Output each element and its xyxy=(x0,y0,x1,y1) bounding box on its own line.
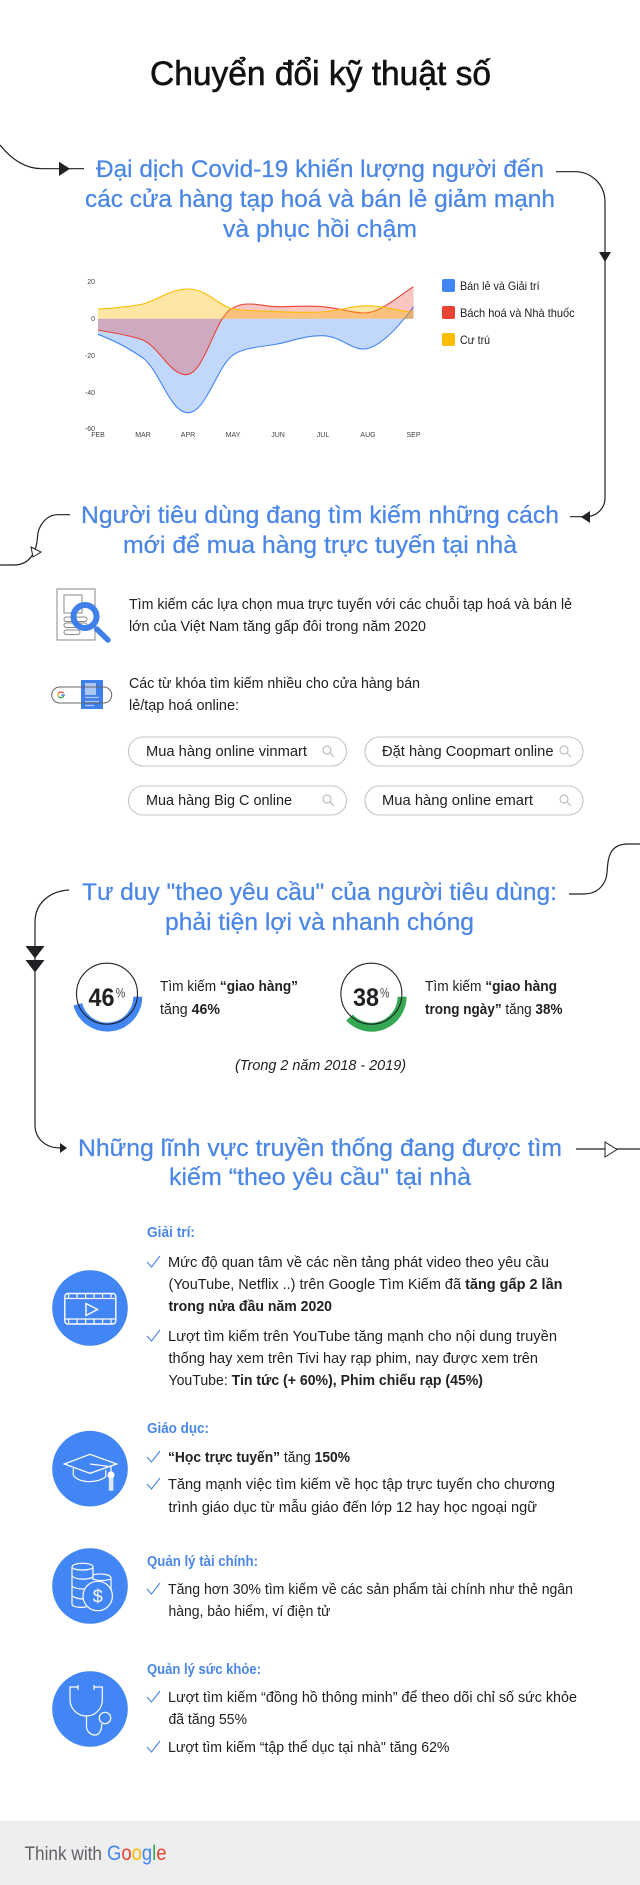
arrow: into section 1 xyxy=(0,145,84,176)
chart y axis labels: 20 xyxy=(87,279,95,286)
icon: coins: $ xyxy=(93,1586,103,1606)
title: Chuyển đổi kỹ thuật số xyxy=(150,55,491,93)
series: residential xyxy=(98,289,414,319)
search pill: vinmart: Mua hàng online vinmart xyxy=(146,744,307,760)
bullet: online learning: “Học trực tuyến” tăng 150% xyxy=(168,1450,350,1466)
bullet: financial products: Tăng hơn 30% tìm kiếm về các sản phẩm tài chính như thẻ ngân xyxy=(168,1582,573,1598)
chart legend: Cư trú xyxy=(460,333,490,347)
bullet: video platforms xyxy=(147,1255,562,1315)
bullet: smart watch: Lượt tìm kiếm “đồng hồ thông minh” để theo dõi chỉ số sức khỏe xyxy=(168,1690,577,1706)
subheading: education: Giáo dục: xyxy=(147,1421,209,1437)
bullet: video platforms: Mức độ quan tâm về các nền tảng phát video theo yêu cầu xyxy=(168,1255,549,1271)
text: popular keywords intro xyxy=(129,676,420,714)
heading: section 1: các cửa hàng tạp hoá và bán lẻ giảm mạnh xyxy=(85,186,555,213)
bullet: smart watch: đã tăng 55% xyxy=(168,1712,247,1728)
chart x axis labels: MAR xyxy=(135,432,151,439)
heading: section 3: Tư duy "theo yêu cầu" của người tiêu dùng: xyxy=(82,879,557,906)
arrow: section 1 to section 2 xyxy=(556,172,611,523)
text: delivery search: Tìm kiếm “giao hàng” xyxy=(160,979,298,995)
bullet: education searches: Tăng mạnh việc tìm kiếm về học tập trực tuyến cho chương xyxy=(168,1477,555,1493)
series: retail and recreation xyxy=(98,307,414,413)
heading: section 2 xyxy=(81,502,559,559)
icon: stethoscope xyxy=(52,1671,128,1747)
bullet: YouTube searches: YouTube: Tin tức (+ 60%), Phim chiếu rạp (45%) xyxy=(168,1373,483,1389)
heading: section 2: Người tiêu dùng đang tìm kiếm những cách xyxy=(81,502,559,529)
stat: 46 percent: 46 xyxy=(88,984,114,1012)
text: same-day delivery search: trong ngày” tăng 38% xyxy=(425,1002,563,1018)
subheading: entertainment: Giải trí: xyxy=(147,1225,195,1241)
panel: education xyxy=(52,1421,555,1516)
stat: 38 percent: % xyxy=(380,984,390,1000)
stat: 38 percent: 38 xyxy=(353,984,379,1012)
heading: section 3: phải tiện lợi và nhanh chóng xyxy=(165,909,474,936)
chart y axis labels: -60 xyxy=(85,426,95,433)
panel: health xyxy=(52,1662,577,1756)
icon: graduation cap xyxy=(52,1431,128,1506)
footer xyxy=(0,1821,640,1885)
text: online grocery search: Tìm kiếm các lựa chọn mua trực tuyến với các chuỗi tạp hoá và bán lẻ xyxy=(129,596,572,613)
icon: video film xyxy=(52,1270,128,1346)
chart x axis labels: JUN xyxy=(271,432,285,439)
chart legend: Bách hoá và Nhà thuốc xyxy=(460,306,575,320)
chart legend xyxy=(442,279,575,347)
search pill: Coopmart: Đặt hàng Coopmart online xyxy=(382,744,554,760)
heading: section 1 xyxy=(85,156,555,243)
logo: Think with Google xyxy=(24,1842,166,1865)
arrow: out of section 2 xyxy=(0,515,70,565)
bullet: video platforms: (YouTube, Netflix ..) trên Google Tìm Kiếm đã tăng gấp 2 lần xyxy=(168,1277,562,1293)
bullet: YouTube searches: Lượt tìm kiếm trên YouTube tăng mạnh cho nội dung truyền xyxy=(168,1329,557,1345)
panel: entertainment xyxy=(52,1225,562,1389)
stat: 46 percent xyxy=(76,963,138,1027)
heading: section 4: kiếm “theo yêu cầu" tại nhà xyxy=(169,1164,471,1191)
search pill: emart: Mua hàng online emart xyxy=(382,793,533,809)
icon: document search xyxy=(57,589,108,640)
stat: 38 percent xyxy=(341,963,402,1027)
area chart xyxy=(85,279,575,439)
heading: section 3 xyxy=(82,879,557,936)
text: popular keywords intro: lẻ/tạp hoá online: xyxy=(129,698,239,714)
chart y axis labels: -20 xyxy=(85,353,95,360)
chart x axis labels: MAY xyxy=(226,432,241,439)
text: popular keywords intro: Các từ khóa tìm kiếm nhiều cho cửa hàng bán xyxy=(129,676,420,692)
chart y axis labels xyxy=(85,279,95,433)
bullet: education searches xyxy=(147,1477,555,1516)
bullet: smart watch xyxy=(147,1690,577,1728)
bullet: education searches: trình giáo dục từ mẫu giáo đến lớp 12 hay học ngoại ngữ xyxy=(168,1499,537,1516)
heading: section 1: Đại dịch Covid-19 khiến lượng người đến xyxy=(96,156,544,183)
bullet: financial products xyxy=(147,1582,573,1620)
search pill: Big C: Mua hàng Big C online xyxy=(146,793,292,809)
text: online grocery search xyxy=(129,596,572,635)
chart y axis labels: -40 xyxy=(85,390,95,397)
chart y axis labels: 0 xyxy=(91,316,95,323)
text: same-day delivery search: Tìm kiếm “giao hàng xyxy=(425,979,557,995)
subheading: finance: Quản lý tài chính: xyxy=(147,1554,258,1570)
chart legend: Bán lẻ và Giải trí xyxy=(460,279,540,293)
arrow: into section 3 xyxy=(569,844,640,894)
text: online grocery search: lớn của Việt Nam tăng gấp đôi trong năm 2020 xyxy=(129,619,426,635)
text: delivery search xyxy=(160,979,298,1018)
logo: Think with Google: Think with xyxy=(24,1844,102,1865)
search pill: Big C xyxy=(128,786,346,815)
bullet: financial products: hàng, bảo hiểm, ví điện tử xyxy=(168,1604,331,1620)
logo: Think with Google: Google xyxy=(107,1842,166,1865)
heading: section 1: và phục hồi chậm xyxy=(223,216,417,243)
bullet: video platforms: trong nửa đầu năm 2020 xyxy=(168,1299,332,1315)
chart x axis labels: JUL xyxy=(317,432,329,439)
panel: finance xyxy=(52,1548,573,1624)
icon: coins xyxy=(52,1548,128,1624)
heading: section 4 xyxy=(78,1135,562,1191)
icon: google search bar with document xyxy=(52,680,112,709)
subheading: health: Quản lý sức khỏe: xyxy=(147,1662,261,1678)
search pill: emart xyxy=(365,786,583,815)
text: delivery search: tăng 46% xyxy=(160,1002,220,1018)
arrow: section 3 to section 4 xyxy=(26,890,69,1153)
heading: section 4: Những lĩnh vực truyền thống đang được tìm xyxy=(78,1135,562,1162)
search pill: Coopmart xyxy=(365,737,583,766)
series: grocery and pharmacy xyxy=(98,287,414,375)
stat: 46 percent: % xyxy=(116,984,125,1000)
chart x axis labels: APR xyxy=(181,432,195,439)
heading: section 2: mới để mua hàng trực tuyến tại nhà xyxy=(123,532,517,559)
chart x axis labels: SEP xyxy=(406,432,421,439)
chart x axis labels: FEB xyxy=(91,432,105,439)
chart x axis labels: AUG xyxy=(360,432,376,439)
arrow: out of section 4 xyxy=(576,1142,640,1157)
search pill: vinmart xyxy=(128,737,346,766)
bullet: YouTube searches: thống hay xem trên Tivi hay rạp phim, nay được xem trên xyxy=(168,1351,538,1367)
chart x axis labels xyxy=(91,432,421,439)
text: period note: (Trong 2 năm 2018 - 2019) xyxy=(235,1058,406,1074)
text: same-day delivery search xyxy=(425,979,563,1018)
bullet: YouTube searches xyxy=(147,1329,557,1389)
bullet: home exercise: Lượt tìm kiếm “tập thể dục tại nhà" tăng 62% xyxy=(168,1740,450,1756)
